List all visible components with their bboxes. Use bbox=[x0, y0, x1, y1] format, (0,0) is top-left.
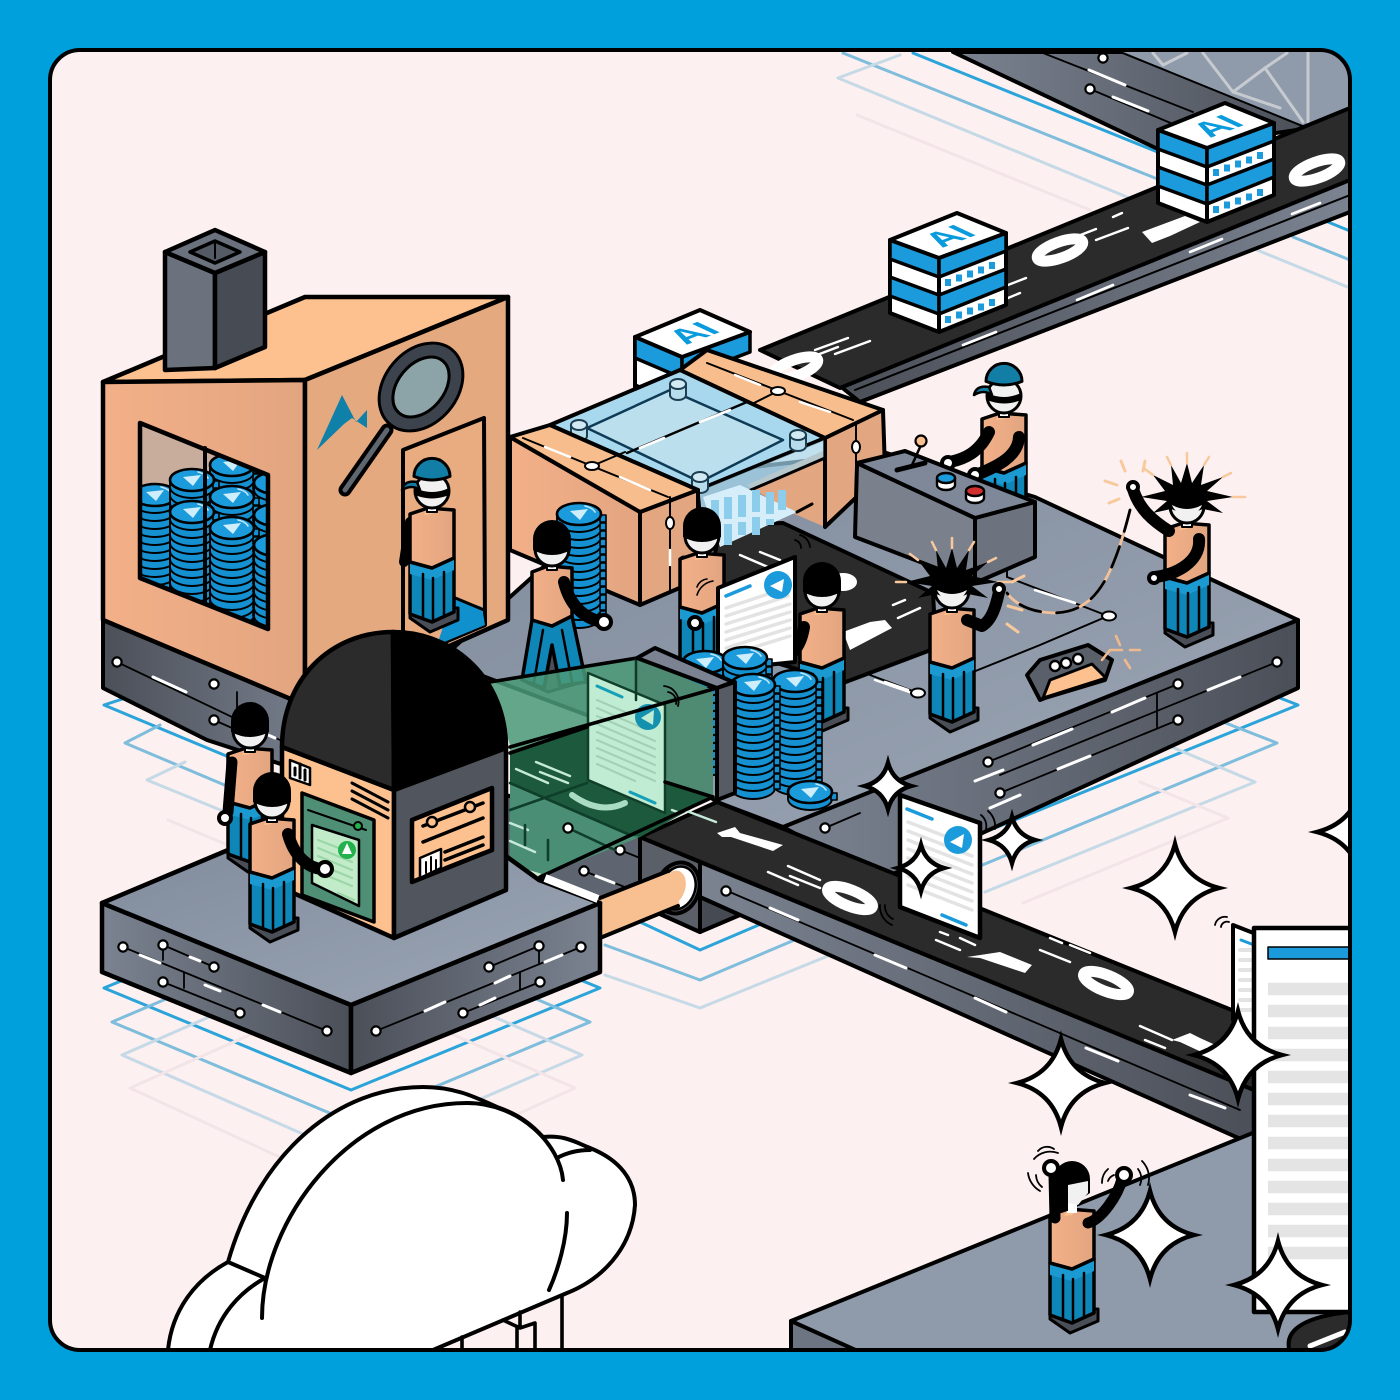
loose coin bbox=[788, 781, 837, 810]
sparkle group bbox=[865, 763, 1400, 932]
scanner end frame bbox=[637, 648, 735, 800]
buttons bbox=[937, 473, 984, 503]
top right platform with truss bbox=[953, 52, 1350, 150]
document in scanner bbox=[588, 673, 665, 813]
road corner bottom right bbox=[1289, 1312, 1352, 1352]
window with coin stacks bbox=[138, 420, 270, 632]
broken open junction box bbox=[1027, 636, 1140, 700]
joystick bbox=[897, 436, 926, 470]
kiosk info panel bbox=[412, 788, 492, 882]
floating document bbox=[900, 795, 980, 938]
junction side wall behind green box bbox=[490, 790, 700, 932]
worker back left bbox=[219, 702, 276, 872]
kiosk touch screen bbox=[302, 793, 374, 922]
factory building bbox=[103, 297, 508, 710]
green translucent scanner box bbox=[490, 658, 717, 885]
person in doorway with cap bbox=[402, 458, 458, 632]
hologram data bars bbox=[703, 485, 812, 547]
doorway bbox=[403, 418, 485, 660]
AI server stack near: AI bbox=[1180, 110, 1253, 141]
worker with electric shock right bbox=[1105, 453, 1245, 647]
upper conveyor road bbox=[760, 108, 1350, 402]
orange machine left block bbox=[510, 425, 698, 605]
AI server stack middle bbox=[890, 213, 1006, 332]
worker carrying coins bbox=[522, 520, 611, 692]
lower road end block bbox=[640, 837, 740, 932]
exposed electric cable bbox=[1007, 510, 1130, 613]
kiosk icon and text lines bbox=[290, 760, 388, 818]
orange machine right block bbox=[680, 350, 885, 527]
operator at console bbox=[940, 362, 1028, 497]
AI server stack near bbox=[1158, 103, 1274, 222]
AI server stack far: AI bbox=[656, 317, 729, 348]
control console bbox=[855, 436, 1035, 583]
main platform bbox=[440, 452, 1298, 880]
worker holding document bbox=[678, 507, 726, 658]
road binary marks bbox=[770, 154, 1342, 384]
cloud bbox=[168, 1087, 635, 1350]
document held up bbox=[718, 557, 795, 670]
motion marks bbox=[664, 535, 1229, 927]
worker with electric shock left bbox=[896, 538, 1024, 732]
large report document bbox=[1233, 925, 1364, 1312]
coin stack behind worker bbox=[557, 503, 606, 628]
orange pipe bbox=[600, 856, 707, 938]
factory building base bbox=[101, 621, 288, 766]
icon: magnifying glass bbox=[338, 342, 464, 496]
worker at touch screen bbox=[250, 772, 332, 942]
lower left platform bbox=[102, 830, 600, 1073]
cheering person bbox=[1028, 1147, 1149, 1333]
floating layer outlines bbox=[104, 53, 1350, 1190]
sparkles lower bbox=[1017, 1011, 1322, 1329]
dome kiosk bbox=[282, 632, 506, 938]
platform circuit wiring bbox=[869, 571, 1117, 698]
lower right platform bbox=[791, 1130, 1350, 1354]
lower conveyor road bbox=[640, 802, 1254, 1145]
worker behind document bbox=[797, 562, 850, 732]
middle dark road bbox=[700, 523, 936, 695]
icon: brand logo bbox=[317, 395, 367, 450]
glass scanner bbox=[550, 370, 825, 547]
coin stacks bbox=[683, 647, 822, 799]
AI server stack far bbox=[632, 308, 752, 388]
road binary marks lower bbox=[717, 827, 1222, 1056]
chimney bbox=[165, 230, 265, 370]
AI server stack middle: AI bbox=[912, 220, 985, 251]
